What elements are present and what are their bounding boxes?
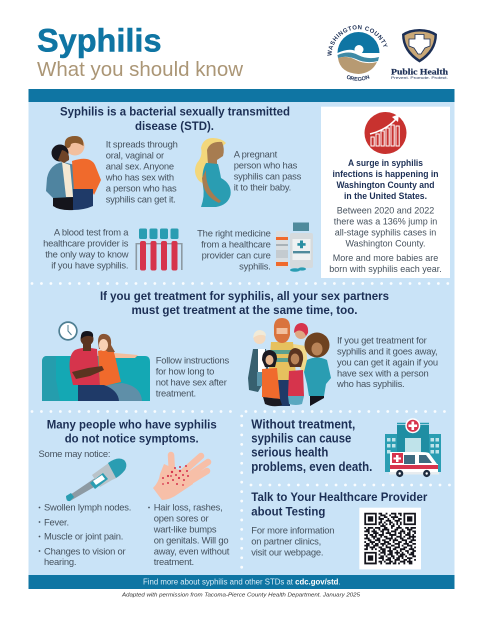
heading: bacterial STD: Syphilis is a bacterial sexually transmitted: [60, 104, 290, 118]
heading: talk to provider: about Testing: [251, 504, 325, 518]
icon: couple on couch with clock: [42, 321, 150, 401]
logo: Washington County Oregon: WASHINGTON COUNTY: [327, 25, 388, 56]
icon: thermometer: [66, 459, 126, 501]
heading: talk to provider: [251, 490, 427, 518]
panel: talk to provider: [251, 490, 427, 569]
callout babies note: born with syphilis each year.: [329, 264, 442, 274]
callout heading: A surge in syphilis: [348, 158, 423, 168]
text: reinfection: who has syphilis.: [336, 378, 404, 389]
text: blood test: healthcare provider is: [43, 237, 129, 248]
list: symptoms right: [148, 502, 230, 567]
icon: medicine bottles: [276, 222, 313, 272]
callout heading: Washington County and: [336, 180, 434, 190]
text: pregnancy: person who has: [234, 159, 298, 170]
callout babies note: More and more babies are: [333, 253, 438, 263]
heading: symptoms: [47, 417, 217, 446]
person: red hair in yellow: [293, 323, 308, 372]
callout babies note: [329, 253, 442, 274]
text: how it spreads: anal sex. Anyone: [106, 161, 174, 172]
text: pregnancy: A pregnant: [234, 148, 278, 159]
text: how it spreads: oral, vaginal or: [106, 150, 164, 161]
text: how it spreads: a person who has: [106, 183, 177, 194]
text: blood test: A blood test from a: [54, 226, 129, 237]
text: follow instructions: Follow instructions: [156, 355, 230, 366]
panel: surge callout card: [321, 107, 450, 278]
icon: rising bar chart: [364, 112, 406, 154]
text: medicine: provider can cure: [202, 250, 271, 261]
list: symptoms right: open sores or: [154, 513, 209, 524]
title: What you should know: [37, 58, 243, 81]
QR code: [359, 508, 421, 569]
list: symptoms left: Muscle or joint pain.: [44, 531, 123, 542]
icon: hand with rash: [153, 455, 208, 500]
text: reinfection: have sex with a person: [337, 367, 428, 378]
text: how it spreads: syphilis can get it.: [106, 194, 176, 205]
text: how it spreads: It spreads through: [106, 139, 178, 150]
bottom banner: Find more about syphilis and other STDs at cdc.gov/std.: [143, 578, 341, 586]
text: partner clinics: visit our webpage.: [251, 546, 323, 557]
text: follow instructions: for how long to: [156, 366, 214, 377]
heading: symptoms: do not notice symptoms.: [65, 432, 199, 446]
person: woman in pink top: [288, 348, 304, 405]
callout statistic: Washington County.: [345, 238, 426, 248]
text: pregnancy: syphilis can pass: [234, 170, 302, 181]
heading: serious problems: Without treatment,: [251, 417, 355, 431]
logo: Washington County Oregon: OREGON: [346, 74, 370, 81]
text: follow instructions: [156, 355, 230, 398]
heading: talk to provider: Talk to Your Healthcare Provider: [251, 490, 427, 504]
list: symptoms left: Swollen lymph nodes.: [44, 502, 131, 513]
text: partner clinics: [251, 525, 334, 557]
person: woman in orange: [262, 350, 282, 406]
text: how it spreads: who has sex with: [105, 172, 174, 183]
person: blond in dark teal jacket: [248, 330, 270, 392]
heading: bacterial STD: [60, 104, 290, 133]
icon: pregnant person: [195, 138, 231, 207]
heading: partners must get treatment: If you get treatment for syphilis, all your sex partners: [100, 289, 389, 303]
icon: group of people: [248, 318, 331, 406]
heading: partners must get treatment: must get treatment at the same time, too.: [132, 303, 358, 317]
panel: what syphilis is: [43, 104, 313, 272]
heading: serious problems: syphilis can cause: [251, 432, 351, 446]
list: symptoms left: [39, 502, 131, 567]
bottom banner: [28, 575, 454, 589]
list: symptoms right: Hair loss, rashes,: [154, 502, 223, 513]
icon: couple embracing: [46, 136, 101, 210]
attribution footnote: Adapted with permission from Tacoma-Pierce County Health Department. January 2025: [121, 593, 361, 599]
logo: Public Health: Public Health: [391, 66, 448, 76]
list: symptoms right: away, even without: [154, 545, 230, 556]
heading: serious problems: serious health: [251, 446, 328, 460]
icon: hospital and ambulance: [385, 418, 441, 477]
list: symptoms left: Fever.: [44, 516, 69, 527]
heading: serious problems: problems, even death.: [251, 460, 372, 474]
top banner bar: [28, 89, 454, 102]
text: reinfection: [336, 334, 438, 389]
callout heading: in the United States.: [344, 191, 427, 201]
text: reinfection: you can get it again if you: [337, 356, 438, 367]
person: bearded man in striped shirt: [269, 318, 296, 406]
logo: Washington County Oregon: [327, 25, 388, 81]
text: medicine: [197, 228, 271, 272]
logo: Public Health: [391, 29, 448, 80]
text: how it spreads: [105, 139, 178, 205]
heading: serious problems: [251, 417, 372, 474]
text: medicine: The right medicine: [197, 228, 271, 239]
logo: Public Health: Prevent. Promote. Protect.: [391, 76, 448, 80]
title: Syphilis: [37, 22, 162, 59]
text: partner clinics: For more information: [251, 525, 334, 536]
title: [37, 22, 243, 81]
callout statistic: all-stage syphilis cases in: [335, 227, 436, 237]
callout statistic: there was a 136% jump in: [334, 216, 437, 226]
text: follow instructions: not have sex after: [156, 377, 227, 388]
text: pregnancy: [234, 148, 302, 192]
callout heading: infections is happening in: [332, 169, 438, 179]
text: medicine: syphilis.: [239, 261, 271, 272]
panel: partner treatment: [42, 289, 438, 406]
list: symptoms left: hearing.: [44, 556, 76, 567]
heading: partners must get treatment: [100, 289, 389, 317]
person: man with afro in teal: [304, 332, 331, 406]
list: symptoms right: treatment.: [154, 556, 194, 567]
callout statistic: Between 2020 and 2022: [337, 205, 434, 215]
icon: blood test tubes: [136, 228, 183, 270]
callout heading: [332, 158, 438, 201]
panel: symptoms: [38, 417, 230, 567]
heading: symptoms: Many people who have syphilis: [47, 417, 217, 431]
panel: without treatment: [251, 417, 441, 477]
text: reinfection: If you get treatment for: [337, 334, 427, 345]
text: follow instructions: treatment.: [156, 388, 196, 398]
text: pregnancy: it to their baby.: [234, 181, 291, 192]
text: reinfection: syphilis and it goes away,: [337, 345, 437, 356]
text: some may notice: Some may notice:: [38, 448, 110, 459]
text: blood test: [43, 226, 129, 270]
heading: bacterial STD: disease (STD).: [135, 119, 214, 133]
text: medicine: from a healthcare: [201, 239, 271, 250]
callout statistic: [334, 205, 437, 248]
list: symptoms left: Changes to vision or: [44, 545, 126, 556]
main light blue panel: [28, 102, 454, 575]
text: blood test: the only way to know: [45, 248, 129, 259]
text: partner clinics: on partner clinics,: [251, 536, 321, 547]
text: blood test: if you have syphilis.: [51, 259, 128, 270]
list: symptoms right: wart-like bumps: [153, 523, 217, 534]
list: symptoms right: on genitals. Will go: [154, 534, 228, 545]
